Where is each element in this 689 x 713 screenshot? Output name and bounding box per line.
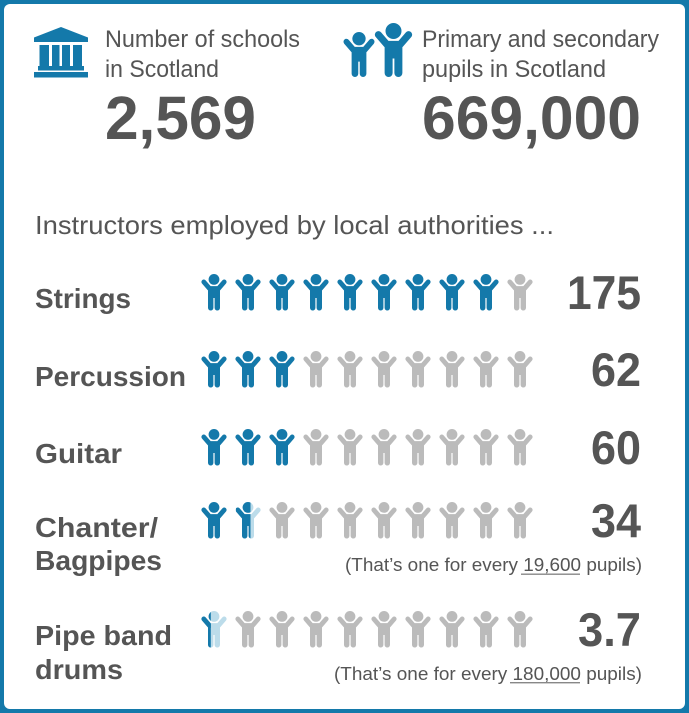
schools label second line: in Scotland (105, 56, 219, 83)
icon: two children (346, 23, 409, 77)
label: chanter/bagpipes: Bagpipes (35, 545, 162, 576)
row: chanter and bagpipes (36, 502, 641, 576)
value: chanter and bagpipes: 34 (591, 494, 641, 547)
label: chanter/bagpipes: Chanter/ (35, 512, 158, 543)
pictogram: strings (204, 274, 530, 310)
value: guitar: 60 (591, 421, 641, 474)
row: pipe band drums (36, 611, 641, 684)
note: one per 180,000 pupils: (That’s one for every 180,000 pupils) (334, 664, 642, 684)
value: strings: 175 (567, 266, 641, 319)
label: pipe band drums (35, 620, 172, 685)
schools figure: 2,569 (105, 84, 256, 152)
pictogram: percussion (204, 351, 530, 387)
pictogram: pipe band drums (204, 611, 530, 647)
row: guitar (35, 421, 641, 474)
icon: school building (34, 27, 88, 78)
value: percussion: 62 (591, 343, 641, 396)
pupils label: Primary and secondary (422, 26, 660, 53)
row: strings (35, 266, 641, 319)
pupils label second line: pupils in Scotland (422, 56, 606, 83)
label: chanter/bagpipes (35, 512, 162, 576)
pictogram: guitar (204, 429, 530, 465)
label: pipe band drums: Pipe band (35, 620, 172, 651)
label: percussion: Percussion (35, 361, 186, 392)
row: percussion (35, 343, 641, 396)
label: guitar: Guitar (35, 438, 122, 469)
section heading: Instructors employed by local authorities ... (35, 210, 554, 240)
label: pipe band drums: drums (35, 654, 123, 685)
panel: number of schools (34, 26, 300, 152)
pupils figure: 669,000 (422, 84, 641, 152)
panel: pupils (346, 23, 660, 152)
pictogram: chanter and bagpipes (204, 502, 530, 538)
schools label: Number of schools (105, 26, 300, 53)
label: strings: Strings (35, 283, 131, 314)
note: one per 19,600 pupils: (That’s one for every 19,600 pupils) (345, 555, 642, 575)
value: pipe band drums: 3.7 (578, 603, 641, 656)
